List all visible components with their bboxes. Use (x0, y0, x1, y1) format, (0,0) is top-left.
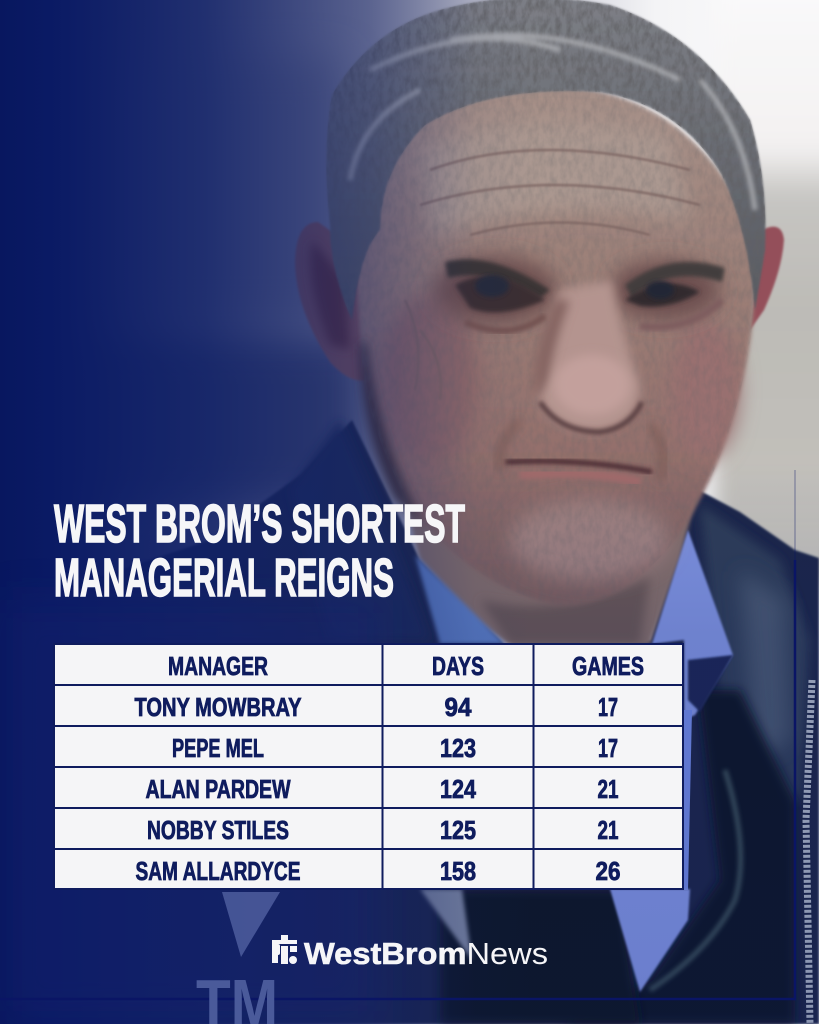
row: Sam Allardyce (136, 856, 620, 886)
row: Pepe Mel: 123 (440, 733, 476, 763)
row: Alan Pardew: 21 (598, 774, 618, 804)
row: Pepe Mel: PEPE MEL (172, 733, 264, 763)
face (352, 85, 755, 605)
row: Tony Mowbray: 17 (598, 692, 618, 722)
row: Tony Mowbray: TONY MOWBRAY (134, 692, 302, 722)
title (54, 494, 465, 608)
row: Pepe Mel (172, 733, 618, 763)
nose (540, 280, 640, 432)
title line 1: WEST BROM’S SHORTEST (54, 494, 465, 554)
table header row: GAMES (572, 651, 644, 681)
row: Tony Mowbray: 94 (444, 692, 472, 722)
shirt collar left (415, 555, 505, 644)
eyes (455, 276, 545, 312)
row: Alan Pardew (146, 774, 618, 804)
neck (405, 480, 700, 650)
wrinkles (405, 150, 700, 400)
row: Nobby Stiles (147, 815, 618, 845)
jacket (0, 420, 819, 1024)
data table (54, 644, 683, 889)
right ear (750, 227, 784, 330)
row: Tony Mowbray (134, 692, 618, 722)
row: Alan Pardew: 124 (440, 774, 476, 804)
table header row: DAYS (432, 651, 484, 681)
row: Sam Allardyce: 158 (440, 856, 476, 886)
shirt lower (610, 889, 690, 992)
skin texture (352, 85, 755, 605)
title line 2: MANAGERIAL REIGNS (54, 548, 394, 608)
row: Nobby Stiles: 21 (598, 815, 618, 845)
hair texture (326, 0, 765, 320)
row: Sam Allardyce: SAM ALLARDYCE (136, 856, 300, 886)
logo: WestBromNews (272, 935, 548, 971)
wordmark: WestBrom News (304, 936, 548, 971)
table header row (168, 651, 644, 681)
eye sockets (433, 256, 557, 324)
row: Nobby Stiles: NOBBY STILES (147, 815, 289, 845)
brows (445, 259, 550, 298)
zip (806, 680, 812, 1024)
icon: publisher mark (272, 935, 297, 964)
row: Nobby Stiles: 125 (440, 815, 476, 845)
shirt badge triangle (222, 892, 280, 957)
row: Sam Allardyce: 26 (596, 856, 620, 886)
mouth (505, 461, 652, 472)
left ear (295, 222, 372, 381)
shirt collar right (652, 530, 733, 720)
bags (465, 316, 545, 331)
face shading (420, 121, 690, 235)
table header row: MANAGER (168, 651, 268, 681)
row: Alan Pardew: ALAN PARDEW (146, 774, 291, 804)
thin frame line (0, 470, 795, 999)
row: Pepe Mel: 17 (598, 733, 618, 763)
hair (326, 0, 765, 320)
